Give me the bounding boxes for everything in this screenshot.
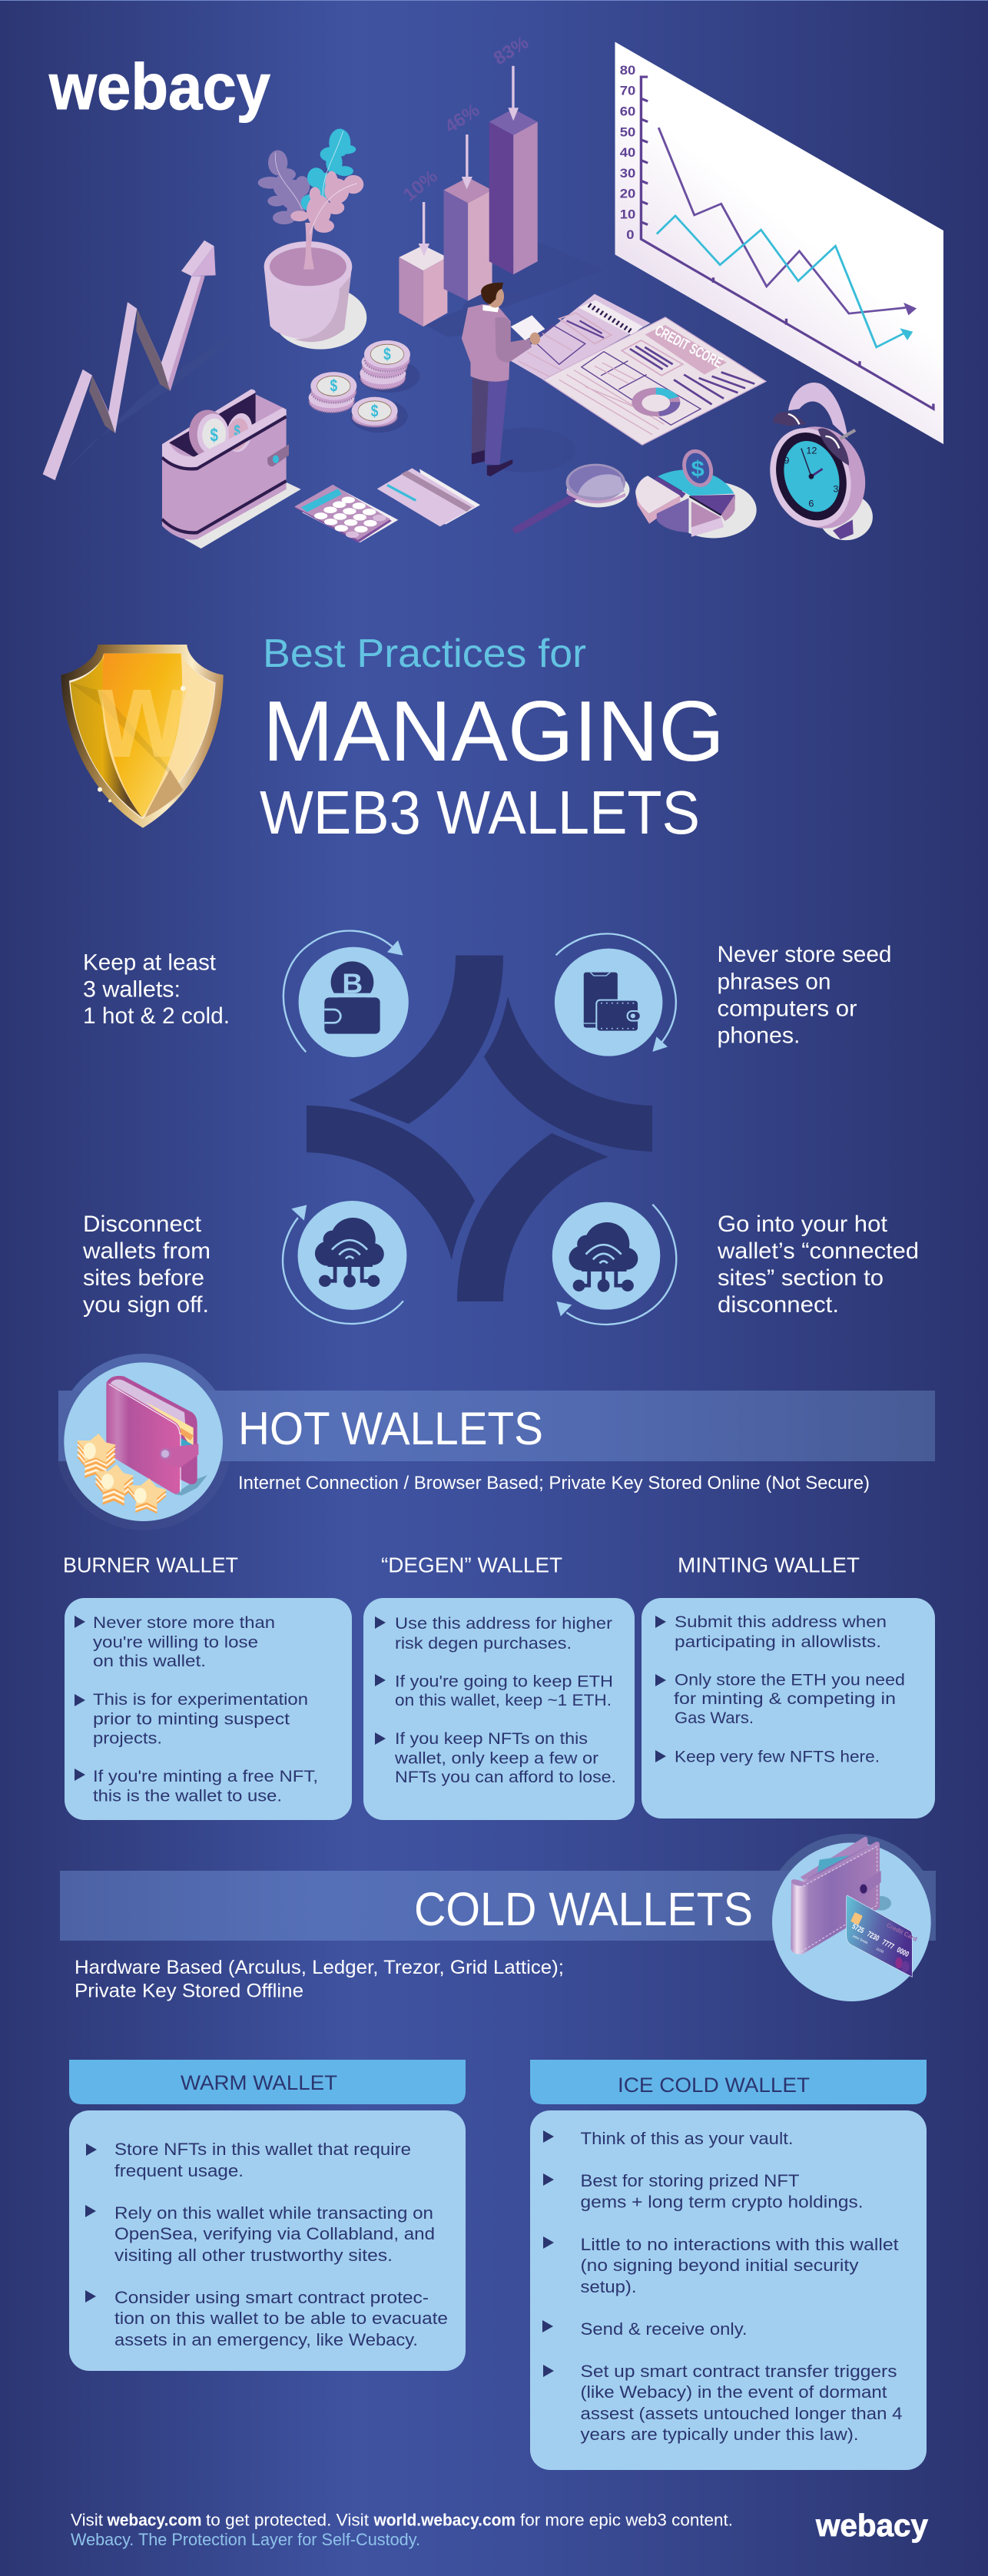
icon: potted plant bbox=[258, 129, 366, 350]
presentation board with line chart: 10 bbox=[620, 207, 635, 221]
icon: alarm clock bbox=[759, 383, 877, 540]
tip 2 text: phrases on bbox=[718, 970, 831, 994]
chart percentage labels: 46% bbox=[441, 100, 483, 138]
icon: alarm clock: 6 bbox=[808, 499, 814, 509]
presentation board with line chart: 70 bbox=[620, 83, 635, 98]
panel: warm wallet: Consider using smart contract protec- bbox=[114, 2288, 429, 2307]
icon: gold shield bbox=[61, 642, 224, 828]
icon: rising zigzag arrow bbox=[43, 240, 233, 480]
icon: gold shield: w bbox=[97, 642, 187, 784]
title: MANAGING bbox=[263, 684, 724, 779]
panel: minting wallet bbox=[642, 1598, 935, 1818]
tip 2 text bbox=[718, 942, 891, 1048]
panel: burner wallet bbox=[65, 1598, 352, 1820]
footer webacy logo: webacy bbox=[815, 2508, 928, 2543]
column headings: “DEGEN” WALLET bbox=[381, 1553, 562, 1576]
panel: warm wallet: Rely on this wallet while transacting on bbox=[114, 2203, 433, 2223]
panel: ice cold wallet: Best for storing prized NFT bbox=[581, 2171, 799, 2190]
icon: cloud network right bbox=[552, 1202, 676, 1324]
tip 4 text: disconnect. bbox=[718, 1292, 839, 1318]
icons: cloud network bbox=[283, 1201, 676, 1324]
panel: burner wallet: If you're minting a free NFT, bbox=[93, 1768, 318, 1785]
tip 2 text: computers or bbox=[718, 996, 857, 1022]
icon: cold wallet illustration: John Smith bbox=[852, 1934, 869, 1945]
footer text: for more epic web3 content. bbox=[520, 2511, 733, 2529]
webacy logo: webacy bbox=[48, 51, 270, 123]
panel: degen wallet bbox=[363, 1598, 635, 1820]
person reading tablet bbox=[462, 283, 545, 476]
cold wallets subtitle: Hardware Based (Arculus, Ledger, Trezor, Grid Lattice); bbox=[75, 1957, 564, 1978]
icon: wallet with coins: $ bbox=[210, 424, 218, 446]
icon: cold wallet illustration bbox=[772, 1837, 931, 2001]
icon: coin stacks bbox=[309, 340, 420, 433]
column headings: BURNER WALLET bbox=[63, 1553, 238, 1576]
tip 4 text: Go into your hot bbox=[718, 1212, 888, 1237]
tip 4 text: sites” section to bbox=[718, 1265, 884, 1291]
chart percentage labels bbox=[400, 32, 532, 206]
tip 3 text: wallets from bbox=[82, 1238, 211, 1264]
icon: cold wallet illustration: Credit Card bbox=[885, 1921, 918, 1943]
icon: coin stacks: $ bbox=[330, 377, 337, 396]
panel: ice cold wallet: Send & receive only. bbox=[581, 2319, 747, 2339]
presentation board with line chart: 0 bbox=[626, 227, 635, 242]
tip 2 text: Never store seed bbox=[718, 942, 891, 967]
panel: warm wallet: visiting all other trustworthy sites. bbox=[114, 2246, 393, 2265]
cold wallets banner bbox=[60, 1834, 940, 2011]
icon: alarm clock: 12 bbox=[806, 446, 817, 456]
panel: degen wallet: If you keep NFTs on this bbox=[395, 1730, 588, 1748]
panel: minting wallet: Submit this address when bbox=[675, 1613, 887, 1631]
panel: ice cold wallet: Little to no interactions with this wallet bbox=[581, 2235, 899, 2254]
panel: warm wallet bbox=[69, 2060, 466, 2371]
panel: burner wallet: this is the wallet to use. bbox=[93, 1787, 282, 1805]
panel: minting wallet: participating in allowlists. bbox=[675, 1633, 881, 1651]
icon: wallet with coins: $ bbox=[234, 422, 240, 439]
tip 3 text: sites before bbox=[83, 1265, 204, 1291]
panel: degen wallet: NFTs you can afford to lose. bbox=[395, 1769, 616, 1786]
tip 3 text: Disconnect bbox=[83, 1212, 202, 1237]
tip 3 text: you sign off. bbox=[83, 1292, 209, 1318]
tip 1 text: Keep at least bbox=[83, 950, 217, 976]
chart percentage labels: 10% bbox=[400, 166, 442, 206]
icon: alarm clock: 9 bbox=[784, 456, 790, 466]
column headings bbox=[63, 1553, 860, 1576]
hero illustration: right half bbox=[377, 42, 943, 540]
hot wallets banner bbox=[55, 1354, 935, 1530]
tip 1 text: 3 wallets: bbox=[83, 977, 181, 1002]
panel: minting wallet: Only store the ETH you need bbox=[675, 1672, 905, 1689]
warm wallet header: WARM WALLET bbox=[181, 2071, 337, 2094]
panel: burner wallet: projects. bbox=[93, 1730, 162, 1747]
panel: ice cold wallet: (no signing beyond initial security bbox=[581, 2256, 859, 2275]
tip 2 text: phones. bbox=[718, 1023, 801, 1048]
panel: ice cold wallet: assest (assets untouched longer than 4 bbox=[581, 2404, 902, 2423]
presentation board with line chart: 20 bbox=[620, 186, 635, 201]
icon: bitcoin wallet bbox=[283, 930, 409, 1057]
tip 4 text bbox=[717, 1212, 919, 1318]
icon: cold wallet illustration: 5725 bbox=[850, 1921, 866, 1935]
presentation board with line chart: 50 bbox=[620, 124, 635, 139]
panel: ice cold wallet: (like Webacy) in the event of dormant bbox=[581, 2382, 887, 2402]
footer text: to get protected. Visit bbox=[206, 2511, 370, 2529]
panel: ice cold wallet: Set up smart contract transfer triggers bbox=[581, 2362, 897, 2381]
icon: calculator bbox=[294, 485, 398, 542]
panel: ice cold wallet bbox=[530, 2060, 927, 2470]
icon: alarm clock: 3 bbox=[833, 484, 839, 495]
panel: warm wallet: frequent usage. bbox=[114, 2161, 244, 2180]
icon: cloud network left bbox=[283, 1201, 406, 1324]
panel: degen wallet: wallet, only keep a few or bbox=[394, 1750, 598, 1767]
tip 3 text bbox=[82, 1212, 211, 1318]
icon: cold wallet illustration: 7777 bbox=[880, 1938, 896, 1951]
icon: pie chart with coin: $ bbox=[691, 457, 705, 482]
documents: credit score report bbox=[511, 294, 766, 445]
bar chart with percentages bbox=[399, 66, 538, 327]
panel: burner wallet: on this wallet. bbox=[93, 1653, 206, 1670]
panel: ice cold wallet: setup). bbox=[581, 2277, 636, 2296]
title: Best Practices for bbox=[263, 632, 586, 676]
panel: degen wallet: Use this address for higher bbox=[395, 1615, 612, 1633]
icon: coin stacks: $ bbox=[383, 345, 391, 364]
icon: credit card bbox=[377, 468, 480, 526]
panel: ice cold wallet: years are typically under this law). bbox=[581, 2425, 859, 2444]
icon: phone and wallet bbox=[555, 933, 676, 1056]
icon: bitcoin wallet: B bbox=[342, 968, 363, 999]
panel: warm wallet: tion on this wallet to be able to evacuate bbox=[114, 2309, 448, 2328]
tip 4 text: wallet’s “connected bbox=[717, 1238, 919, 1264]
ice cold wallet header: ICE COLD WALLET bbox=[618, 2074, 810, 2097]
icon: hot wallet illustration bbox=[64, 1362, 223, 1521]
icons: bitcoin wallet and phone wallet bbox=[283, 930, 676, 1057]
panel: ice cold wallet: gems + long term crypto holdings. bbox=[581, 2193, 864, 2211]
cold wallets subtitle: Private Key Stored Offline bbox=[75, 1981, 303, 2002]
title: WEB3 WALLETS bbox=[260, 778, 700, 847]
panel: minting wallet: Keep very few NFTS here. bbox=[675, 1749, 880, 1765]
icon: cold wallet illustration: 11/30 bbox=[876, 1947, 885, 1954]
cold wallets banner: COLD WALLETS bbox=[414, 1883, 753, 1935]
credit score label: CREDIT SCORE bbox=[652, 323, 724, 371]
central four-arc emblem bbox=[307, 956, 652, 1301]
presentation board with line chart bbox=[615, 42, 943, 444]
cold wallets subtitle bbox=[75, 1957, 564, 2002]
tip 1 text: 1 hot & 2 cold. bbox=[83, 1003, 230, 1029]
panel: burner wallet: Never store more than bbox=[93, 1614, 275, 1632]
floor shadows bbox=[425, 243, 604, 472]
icon: coin stacks: $ bbox=[371, 402, 378, 421]
title bbox=[260, 632, 724, 847]
icon: pie chart with coin bbox=[635, 446, 757, 538]
tip 1 text bbox=[83, 950, 230, 1029]
presentation board with line chart: 80 bbox=[620, 63, 635, 78]
footer text: Webacy. The Protection Layer for Self-Custody. bbox=[71, 2530, 420, 2549]
footer text bbox=[71, 2511, 733, 2549]
panel: ice cold wallet: Think of this as your vault. bbox=[581, 2129, 793, 2148]
panel: minting wallet: Gas Wars. bbox=[675, 1709, 754, 1727]
warm wallet header bbox=[69, 2060, 466, 2104]
ice cold wallet header bbox=[530, 2060, 927, 2104]
icon: wallet with coins bbox=[162, 390, 301, 549]
panel: warm wallet: OpenSea, verifying via Collabland, and bbox=[114, 2224, 435, 2243]
footer text: Visit bbox=[71, 2511, 104, 2529]
hero illustration: left half bbox=[43, 129, 420, 549]
presentation board with line chart: 40 bbox=[620, 145, 635, 160]
icon: cold wallet illustration: 7230 bbox=[866, 1929, 881, 1943]
panel: degen wallet: on this wallet, keep ~1 ETH. bbox=[395, 1692, 612, 1709]
panel: degen wallet: risk degen purchases. bbox=[395, 1635, 572, 1653]
footer text: webacy.com bbox=[107, 2511, 201, 2529]
panel: warm wallet: Store NFTs in this wallet that require bbox=[114, 2140, 411, 2159]
hot wallets banner: HOT WALLETS bbox=[238, 1403, 543, 1454]
panel: degen wallet: If you're going to keep ETH bbox=[395, 1673, 613, 1690]
icon: magnifying glass bbox=[516, 464, 629, 530]
panel: burner wallet: you're willing to lose bbox=[93, 1633, 258, 1652]
footer text: world.webacy.com bbox=[373, 2511, 516, 2529]
chart percentage labels: 83% bbox=[490, 32, 532, 69]
presentation board with line chart: 30 bbox=[620, 166, 635, 181]
panel: burner wallet: This is for experimentation bbox=[93, 1691, 308, 1709]
column headings: MINTING WALLET bbox=[678, 1553, 860, 1576]
panel: burner wallet: prior to minting suspect bbox=[93, 1710, 290, 1729]
presentation board with line chart: 60 bbox=[620, 104, 635, 118]
panel: warm wallet: assets in an emergency, like Webacy. bbox=[114, 2330, 418, 2349]
icon: cold wallet illustration: 0000 bbox=[896, 1945, 910, 1958]
panel: minting wallet: for minting & competing in bbox=[674, 1690, 896, 1708]
hot wallets subtitle: Internet Connection / Browser Based; Private Key Stored Online (Not Secure) bbox=[238, 1473, 870, 1494]
